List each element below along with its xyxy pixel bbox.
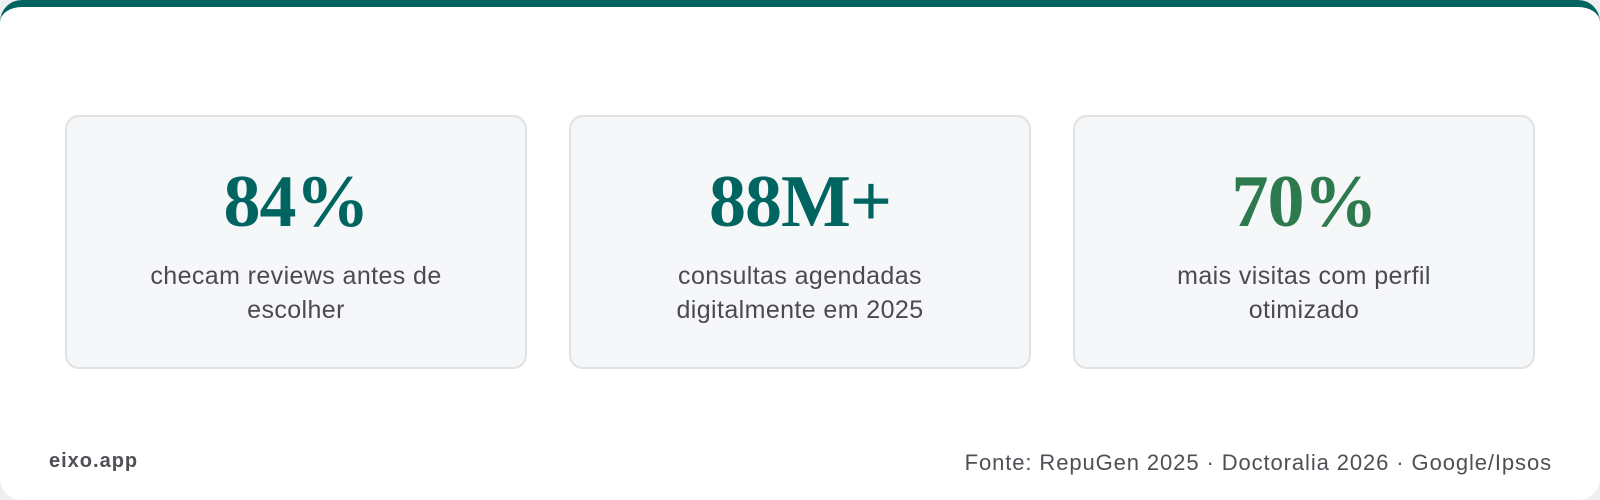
label: reviews: checam reviews antes de escolher — [150, 262, 442, 324]
stat: 70%: 70% — [1232, 161, 1376, 243]
label: visitas: mais visitas com perfil otimizado — [1177, 262, 1431, 324]
card: consultas — [569, 115, 1031, 369]
label: consultas: consultas agendadas digitalmente em 2025 — [676, 262, 924, 324]
stat: 84%: 84% — [224, 161, 368, 243]
footer source: Fonte: RepuGen 2025 · Doctoralia 2026 · Google/Ipsos — [965, 450, 1552, 475]
footer brand: eixo.app — [49, 450, 138, 472]
card: reviews — [65, 115, 527, 369]
stat: 88M+: 88M+ — [709, 161, 891, 243]
card: visitas — [1073, 115, 1535, 369]
